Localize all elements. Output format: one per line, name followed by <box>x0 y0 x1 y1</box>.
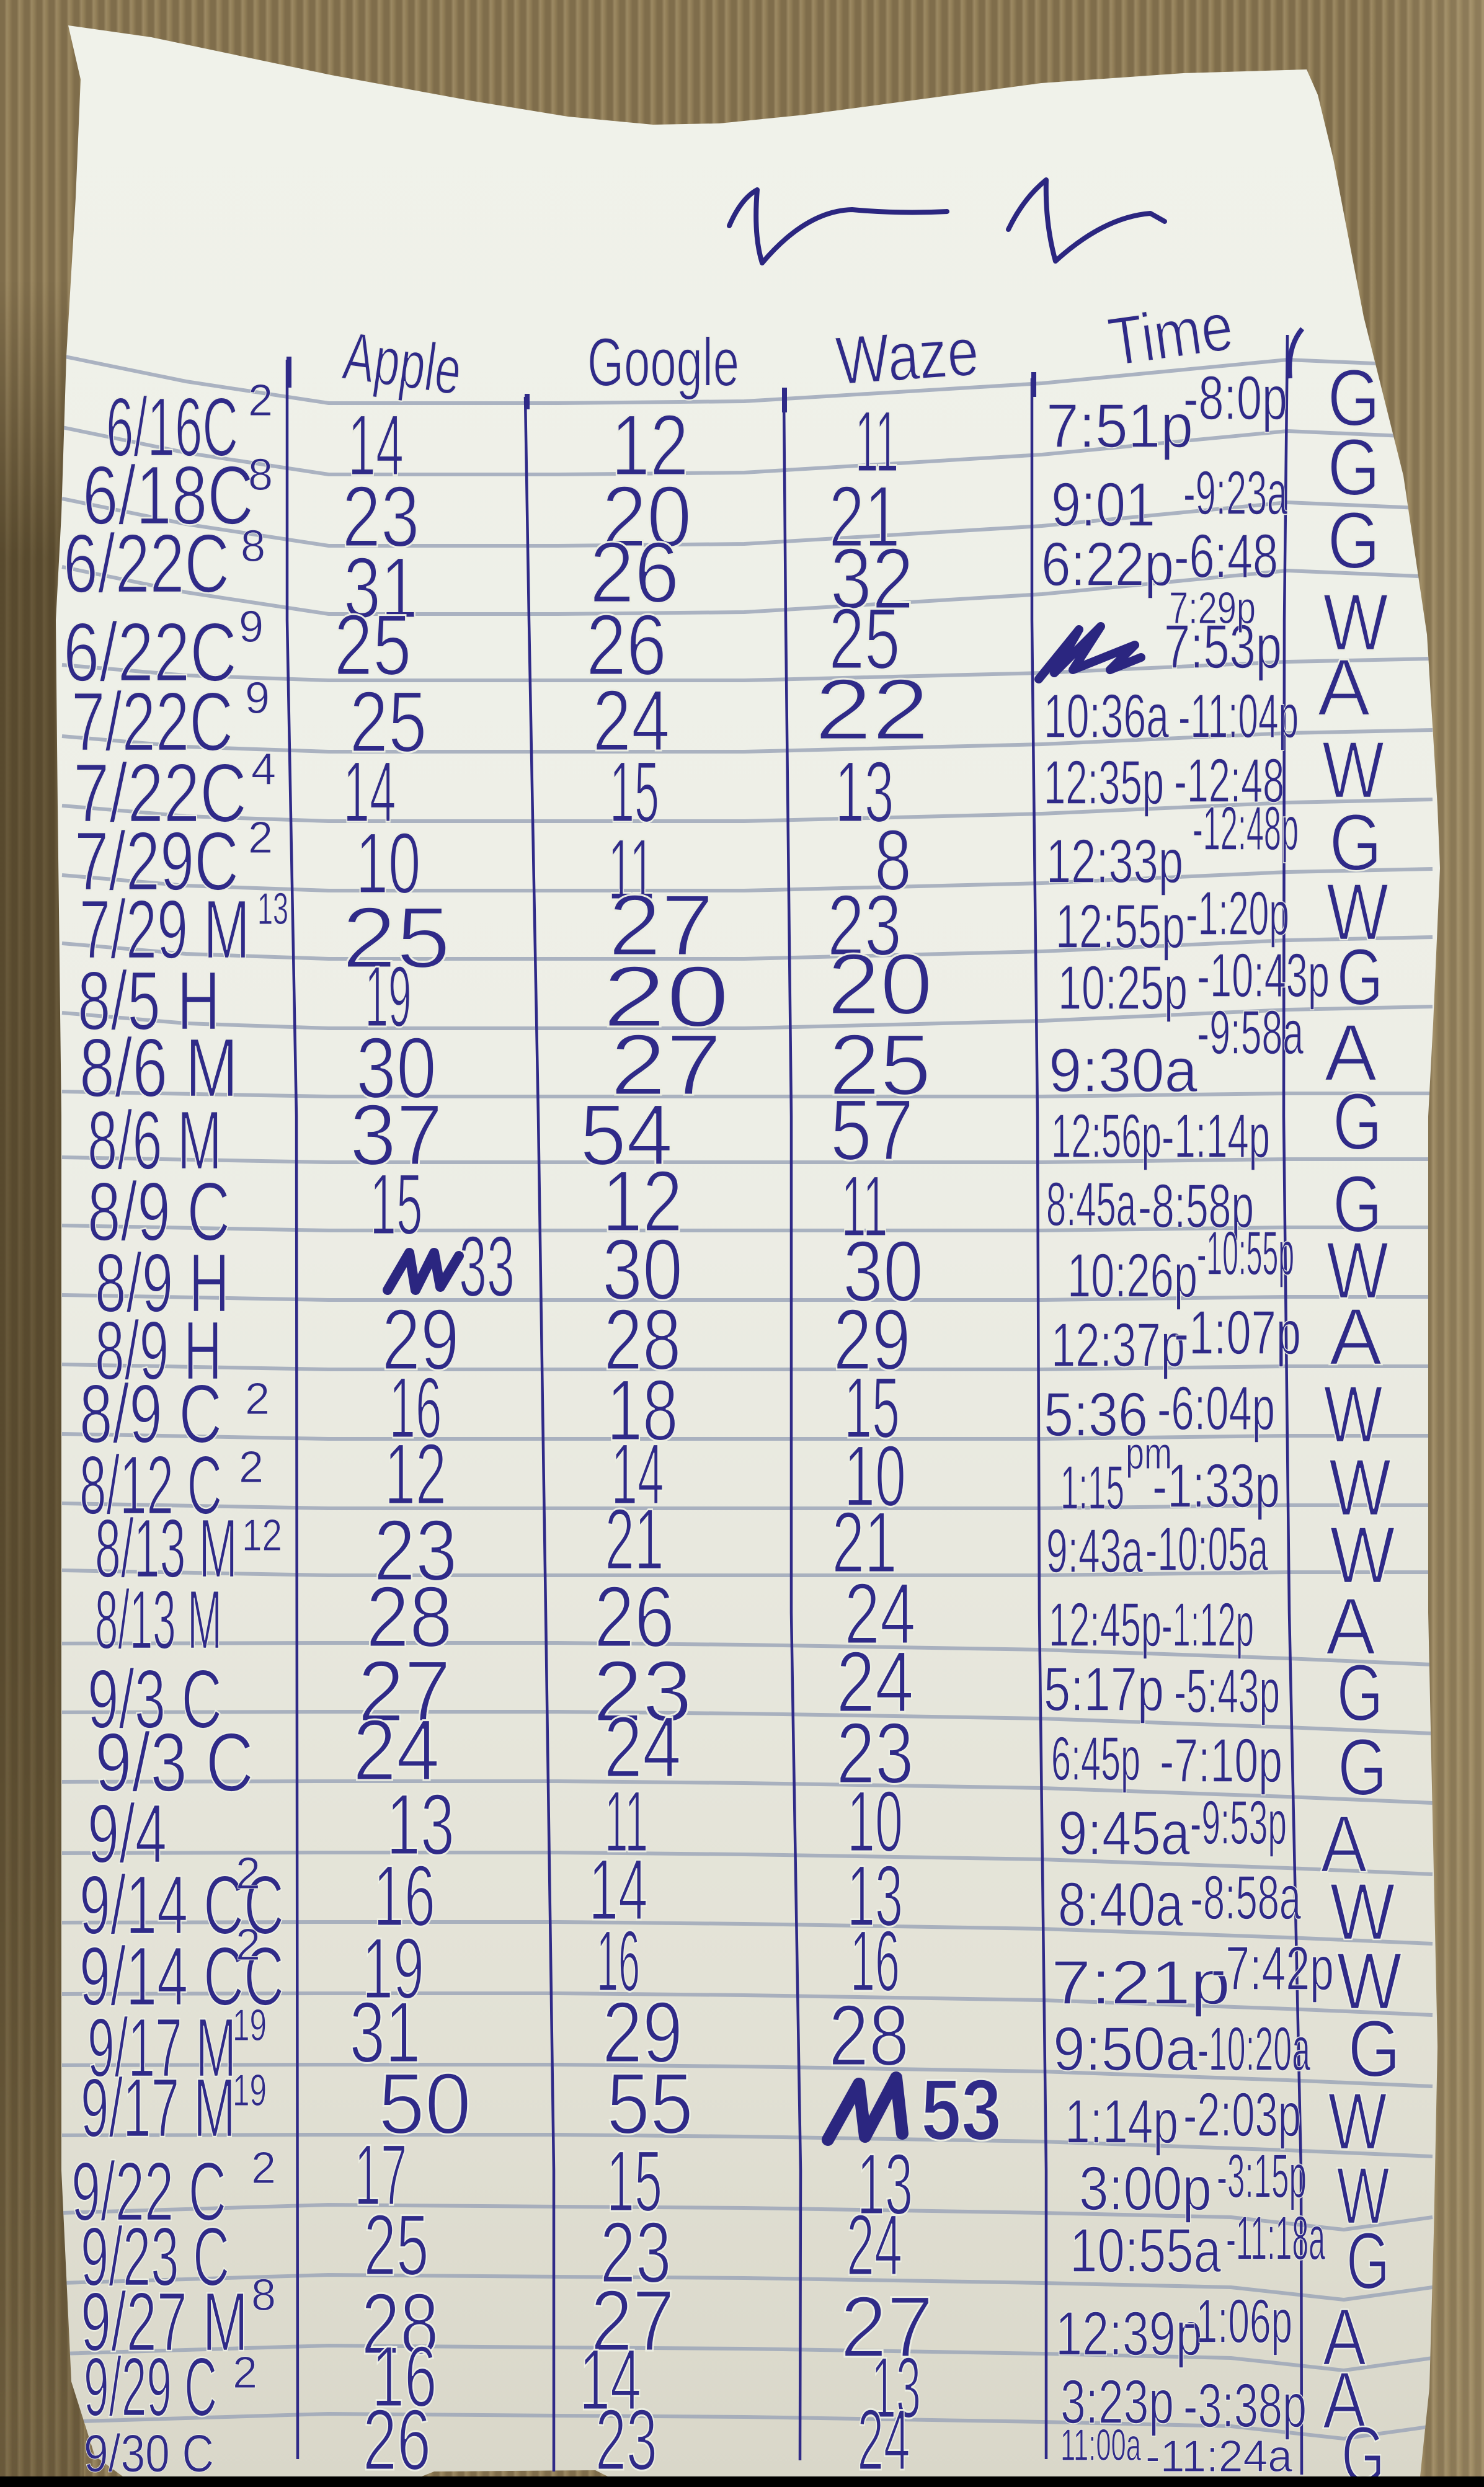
row 9/14 C second: 16 <box>597 1912 640 2009</box>
row 9/3 C second: 23 <box>836 1704 914 1802</box>
row 8/13 M: 9:43a <box>1046 1516 1143 1586</box>
row 8/13 M <box>95 1490 1395 1600</box>
row 6/18 C: -9:23a <box>1183 458 1287 528</box>
row 8/6 M: 27 <box>610 1016 722 1113</box>
row 9/17 M second: W <box>1328 2076 1387 2166</box>
row 9/3 C: 5:17p <box>1044 1655 1164 1724</box>
row 7/29 C: -12:48p <box>1193 794 1299 863</box>
row 8/5 H <box>78 932 1383 1048</box>
row 7/22 C second: 15 <box>610 743 659 840</box>
row 9/27 M: 27 <box>590 2272 675 2369</box>
row 7/29 C: 12:33p <box>1046 827 1183 896</box>
row 8/9 C: 15 <box>370 1155 423 1253</box>
row 9/29 C <box>84 2328 1366 2445</box>
row 8/6 M second: G <box>1333 1076 1382 1167</box>
row 8/9 C: 11 <box>841 1157 888 1255</box>
row 9/17 M second: 9/17 M <box>81 2061 236 2155</box>
scribble: top squiggles <box>729 180 1165 263</box>
row 7/29 M: 25 <box>342 889 450 986</box>
row 9/23 C: 9/23 C <box>81 2210 229 2303</box>
row 8/9 H second: 28 <box>604 1291 681 1388</box>
row 6/16 C: 14 <box>348 396 404 494</box>
row 9/22 C: 3:00p <box>1079 2154 1212 2223</box>
column divider lines <box>287 329 1302 2475</box>
row 8/9 C second: 5:36 <box>1044 1380 1148 1449</box>
row 9/4 <box>87 1773 1367 1889</box>
row 7/29 C: 10 <box>356 814 420 912</box>
row 9/23 C <box>81 2196 1390 2306</box>
row 6/22 C: 31 <box>344 539 418 636</box>
row 8/9 H <box>95 1217 1388 1330</box>
row 6/16 C: 7:51p <box>1046 391 1193 461</box>
row 6/22 C second: 6/22C <box>63 605 237 699</box>
row 6/16 C: 12 <box>611 396 688 494</box>
row 8/13 M: -10:05a <box>1145 1515 1268 1584</box>
row 8/12 C: -1:33p <box>1152 1451 1280 1521</box>
row 9/17 M second: 53 <box>921 2061 1002 2158</box>
row 8/6 M second: -1:14p <box>1162 1101 1270 1171</box>
column headings: Time <box>1104 288 1237 381</box>
column headings: Google <box>587 324 739 401</box>
row 9/14 C first: 2 <box>236 1849 260 1898</box>
row 8/9 H: -10:55p <box>1197 1219 1294 1288</box>
row 8/13 M: W <box>1330 1510 1395 1600</box>
row 9/22 C: 17 <box>355 2126 407 2223</box>
row 8/9 C second: 18 <box>606 1361 678 1459</box>
row 9/22 C: 13 <box>857 2135 913 2233</box>
row 9/23 C: 23 <box>600 2204 671 2301</box>
row 9/27 M: 9/27 M <box>81 2275 248 2369</box>
row 9/22 C: 2 <box>251 2143 276 2193</box>
row 8/6 M: A <box>1325 1007 1377 1098</box>
row 9/3 C: G <box>1337 1647 1383 1738</box>
row 9/3 C second: G <box>1338 1722 1387 1812</box>
row 8/13 M second: 26 <box>594 1568 675 1665</box>
row 7/22 C: A <box>1317 642 1371 732</box>
row 7/22 C: 22 <box>815 661 929 758</box>
row 8/5 H: 10:25p <box>1058 953 1188 1023</box>
row 8/12 C: 12 <box>384 1425 447 1523</box>
row 8/9 C second: 16 <box>389 1359 442 1456</box>
row 9/3 C: 24 <box>836 1633 914 1730</box>
row 8/13 M second <box>95 1565 1375 1671</box>
row 9/29 C: 16 <box>372 2328 437 2425</box>
row 8/6 M: 8/6 M <box>79 1021 238 1114</box>
row 8/13 M second: 8/13 M <box>95 1573 222 1666</box>
row 9/4: A <box>1321 1799 1367 1889</box>
column headings: Waze <box>833 313 981 399</box>
row 7/22 C second: W <box>1322 724 1384 815</box>
row 7/29 C: 11 <box>608 821 655 918</box>
row 9/4: 9/4 <box>87 1787 167 1880</box>
row 8/12 C: W <box>1329 1442 1391 1533</box>
row 8/9 H: 30 <box>602 1221 683 1318</box>
row 6/22 C: -6:48 <box>1174 522 1278 591</box>
row 9/23 C: -11:18a <box>1226 2204 1325 2273</box>
row 7/22 C: -11:04p <box>1178 682 1299 751</box>
row 7/22 C: 7/22C <box>71 675 233 768</box>
row 8/13 M: 23 <box>373 1502 458 1599</box>
row 9/17 M first <box>87 1983 1400 2094</box>
row 9/14 C first: -8:58a <box>1190 1863 1301 1933</box>
row 7/29 M <box>79 866 1388 986</box>
row 6/18 C: 21 <box>829 468 900 565</box>
row 9/27 M: 27 <box>840 2278 933 2375</box>
row 9/27 M: A <box>1323 2292 1366 2382</box>
row 8/9 C: 8:45a <box>1046 1170 1136 1239</box>
row 9/3 C second: 24 <box>604 1698 681 1795</box>
row 9/27 M <box>81 2271 1366 2382</box>
row 8/13 M second: A <box>1326 1581 1375 1671</box>
row 9/17 M second: 1:14p <box>1065 2087 1178 2156</box>
row 6/16 C: -8:0p <box>1183 363 1287 433</box>
row 7/29 M: 23 <box>827 876 902 974</box>
row 7/22 C: 24 <box>593 672 670 769</box>
row 9/29 C: A <box>1323 2355 1366 2445</box>
row 9/17 M second: 55 <box>606 2055 693 2152</box>
row 9/14 C second: W <box>1337 1936 1402 2026</box>
row 9/27 M: 12:39p <box>1055 2299 1202 2369</box>
row 9/14 C first: 8:40a <box>1058 1870 1183 1939</box>
row 9/3 C: 9/3 C <box>87 1652 222 1746</box>
row 9/17 M first: 29 <box>602 1983 683 2081</box>
row 8/12 C: 8/12 C <box>79 1438 222 1532</box>
row 6/16 C: 11 <box>855 393 899 490</box>
row 8/12 C <box>79 1425 1391 1533</box>
row 8/13 M: 21 <box>605 1490 664 1588</box>
row 9/4: 13 <box>386 1776 455 1873</box>
row 8/9 H second: 29 <box>833 1291 910 1388</box>
row 6/22 C: 26 <box>589 523 680 621</box>
row 8/13 M: 12 <box>242 1511 282 1560</box>
row 9/3 C: 23 <box>593 1642 692 1740</box>
row 9/17 M first: G <box>1348 2003 1400 2094</box>
row 7/29 C: 7/29C <box>74 814 239 908</box>
row 7/22 C second: -12:48 <box>1174 746 1284 816</box>
row 9/30 C: -11:24a <box>1145 2432 1293 2481</box>
row 8/13 M second: 12:45p <box>1049 1590 1162 1660</box>
row 8/13 M: 21 <box>832 1493 897 1591</box>
row 9/14 C second: 9/14 CC <box>79 1929 284 2023</box>
row 7/22 C <box>71 642 1371 770</box>
row 6/18 C: 9:01 <box>1051 470 1155 540</box>
row 9/22 C <box>71 2126 1390 2241</box>
row 9/14 C second: -7:42p <box>1211 1934 1334 2003</box>
row 8/9 C <box>87 1152 1382 1258</box>
row 9/14 C second: 19 <box>362 1920 424 2017</box>
row 9/17 M second: -2:03p <box>1183 2080 1301 2150</box>
row 6/16 C: G <box>1327 352 1380 443</box>
row 9/29 C: 3:23p <box>1060 2367 1174 2437</box>
row 6/18 C: 20 <box>602 468 692 565</box>
row 6/22 C: 8 <box>241 522 265 571</box>
row 6/22 C second: 7:53p <box>1164 612 1282 682</box>
row 9/14 C first: 13 <box>847 1847 903 1944</box>
row 7/29 M: 7/29 M <box>79 883 250 976</box>
row 8/6 M: 30 <box>356 1019 437 1116</box>
row 8/9 C second: 2 <box>245 1374 270 1424</box>
row 8/6 M: 9:30a <box>1049 1036 1197 1105</box>
row 9/17 M second: 19 <box>233 2066 267 2116</box>
row 7/22 C second: 12:35p <box>1044 748 1164 817</box>
row 9/3 C: -5:43p <box>1174 1657 1280 1726</box>
row 8/6 M <box>79 998 1377 1116</box>
row 9/14 C second <box>79 1912 1402 2026</box>
column headings: Apple <box>339 318 466 409</box>
row 9/23 C: 25 <box>363 2196 429 2293</box>
row 9/17 M first: 19 <box>233 2001 267 2050</box>
row 9/17 M first: -10:20a <box>1197 2014 1310 2084</box>
row 9/30 C: 24 <box>857 2391 910 2487</box>
row 8/9 H: 8/9 H <box>95 1236 229 1330</box>
row 9/29 C: 9/29 C <box>84 2340 217 2434</box>
row 8/12 C: 14 <box>611 1425 664 1523</box>
row 7/29 M: 27 <box>608 876 714 974</box>
row 8/5 H: G <box>1337 932 1383 1022</box>
row 8/9 C second: -6:04p <box>1157 1374 1275 1443</box>
row 7/22 C second: 14 <box>344 743 396 840</box>
row 8/9 H: 10:26p <box>1067 1241 1197 1310</box>
row 6/22 C second: 26 <box>586 596 667 693</box>
row 8/9 H second: -1:07p <box>1174 1298 1301 1368</box>
row 9/17 M second: 50 <box>378 2055 471 2152</box>
row 7/22 C: 10:36a <box>1044 682 1169 751</box>
row 7/29 M: 12:55p <box>1055 892 1185 961</box>
row 9/29 C: -3:38p <box>1183 2371 1307 2440</box>
row 7/29 C <box>74 794 1382 918</box>
row 9/3 C second: 9/3 C <box>95 1715 254 1809</box>
row 7/22 C: 9 <box>245 674 270 723</box>
row 9/27 M: -1:06p <box>1183 2287 1292 2356</box>
row 9/17 M first: 28 <box>829 1986 909 2084</box>
row 7/29 C: G <box>1330 797 1382 888</box>
row 8/6 M second: 57 <box>830 1081 914 1178</box>
row 7/29 M: -1:20p <box>1186 879 1289 948</box>
row 8/9 C: 12 <box>602 1152 683 1250</box>
row 9/27 M: 28 <box>361 2275 439 2372</box>
row 6/22 C second: 25 <box>334 596 412 693</box>
row 6/18 C: 6/18C <box>82 448 254 542</box>
row 9/17 M first: 31 <box>350 1983 420 2081</box>
row 7/29 M: W <box>1326 866 1388 957</box>
row 8/13 M second: -1:12p <box>1162 1590 1254 1660</box>
row 6/22 C second <box>63 577 1388 699</box>
row 6/22 C second: 7:29p <box>1169 584 1256 633</box>
row 9/30 C: 11:00a <box>1060 2421 1142 2470</box>
row 9/14 C second: 2 <box>236 1920 260 1970</box>
row 9/23 C: 10:55a <box>1070 2216 1221 2285</box>
row 8/5 H: 20 <box>603 948 729 1045</box>
row 8/13 M: 8/13 M <box>95 1502 238 1595</box>
row 8/6 M second: 37 <box>350 1086 443 1183</box>
row 9/14 C second: 16 <box>850 1912 900 2009</box>
row 6/22 C second: 9 <box>239 602 264 652</box>
row 6/22 C: 32 <box>830 530 914 627</box>
row 9/22 C: 9/22 C <box>71 2145 226 2238</box>
row 9/3 C: 27 <box>358 1642 451 1740</box>
row 9/14 C second: 7:21p <box>1051 1948 1230 2018</box>
row 9/29 C: 13 <box>871 2339 921 2436</box>
row 9/3 C second: -7:10p <box>1160 1726 1282 1795</box>
row 6/16 C <box>106 352 1380 494</box>
row 6/18 C: 23 <box>342 468 419 565</box>
row 6/22 C <box>63 495 1380 636</box>
row 7/22 C second: 13 <box>835 743 894 840</box>
row 6/22 C: 6:22p <box>1041 530 1174 599</box>
row 8/9 H second: 12:37p <box>1051 1310 1185 1380</box>
row 8/9 H second: 29 <box>382 1291 459 1388</box>
row 8/9 H second: 8/9 H <box>95 1304 222 1397</box>
row 6/22 C second: 25 <box>829 590 900 687</box>
row 6/16 C: 6/16C <box>106 380 238 474</box>
row 9/29 C: 14 <box>579 2331 641 2428</box>
row 7/29 M: 13 <box>257 884 288 934</box>
row 9/4: -9:53p <box>1190 1788 1287 1857</box>
row 8/9 H: W <box>1326 1225 1388 1315</box>
row 9/27 M: 8 <box>251 2271 276 2320</box>
row 9/29 C: 2 <box>233 2348 257 2398</box>
row 9/30 C: 9/30 C <box>84 2424 214 2483</box>
row 7/29 C: 2 <box>248 813 273 863</box>
row 9/14 C first: 14 <box>589 1841 647 1938</box>
row 8/13 M second: 28 <box>366 1568 453 1665</box>
row 9/30 C <box>84 2391 1385 2487</box>
row 8/12 C: 1:15 <box>1060 1453 1124 1523</box>
row 6/16 C: 2 <box>248 376 273 425</box>
row 9/30 C: 26 <box>363 2391 431 2487</box>
row 7/22 C second <box>73 724 1384 840</box>
row 6/22 C: 6/22C <box>63 517 229 610</box>
row 9/22 C: W <box>1337 2150 1390 2241</box>
row 7/22 C second: 4 <box>251 745 276 794</box>
row 8/9 H second: A <box>1330 1291 1382 1382</box>
row 8/9 C: -8:58p <box>1138 1172 1254 1241</box>
row 8/6 M: 25 <box>829 1016 931 1113</box>
black bar along bottom edge <box>0 2476 1484 2487</box>
row 9/30 C: 23 <box>595 2391 657 2487</box>
row 9/14 C first: W <box>1330 1866 1395 1957</box>
row 9/4: 9:45a <box>1058 1799 1190 1868</box>
row 8/9 C second: 15 <box>844 1359 900 1456</box>
row 8/9 C second: W <box>1323 1369 1383 1459</box>
row 9/3 C second: 24 <box>353 1701 440 1799</box>
row 9/14 C first <box>79 1841 1395 1957</box>
row 9/3 C second: 6:45p <box>1051 1724 1140 1794</box>
row 7/22 C second: 7/22C <box>73 746 247 840</box>
row 8/6 M second: 8/6 M <box>87 1093 222 1187</box>
row 9/22 C: 15 <box>606 2132 662 2230</box>
row 8/9 H: 33 <box>459 1217 515 1315</box>
row 6/18 C: 8 <box>248 450 273 500</box>
row 8/6 M: -9:58a <box>1197 998 1304 1067</box>
row 8/5 H: 8/5 H <box>78 954 220 1048</box>
row 9/17 M second <box>81 2055 1387 2166</box>
row 9/4: 11 <box>605 1773 648 1870</box>
row 9/3 C <box>87 1633 1383 1746</box>
row 9/3 C second <box>95 1698 1387 1812</box>
column headings <box>339 288 1237 409</box>
row 9/23 C: G <box>1346 2215 1390 2306</box>
row 8/12 C: 2 <box>239 1443 264 1492</box>
row 6/18 C: G <box>1327 422 1380 512</box>
row 8/9 H second <box>95 1291 1382 1397</box>
row 9/4: 10 <box>847 1773 903 1870</box>
row 8/6 M second: 54 <box>580 1086 673 1183</box>
row 9/17 M first: 9:50a <box>1053 2014 1197 2084</box>
row 8/12 C: pm <box>1126 1429 1172 1479</box>
row 8/5 H: 19 <box>365 948 412 1045</box>
row 8/6 M second: 12:56p <box>1051 1101 1162 1171</box>
row 6/22 C: G <box>1327 495 1380 585</box>
row 8/5 H: -10:43p <box>1197 941 1330 1010</box>
row 9/14 C first: 16 <box>373 1847 435 1944</box>
row 8/9 C second: 8/9 C <box>79 1367 222 1461</box>
row 7/29 C: 8 <box>874 811 912 909</box>
row 8/6 M second <box>87 1076 1382 1187</box>
row 6/22 C second: W <box>1323 577 1388 667</box>
row 8/12 C: 10 <box>844 1427 906 1524</box>
row 9/22 C: -3:15p <box>1217 2142 1307 2211</box>
row 8/13 M second: 24 <box>845 1565 915 1662</box>
row 9/17 M first: 9/17 M <box>87 2001 236 2094</box>
row 9/23 C: 24 <box>846 2196 902 2293</box>
row 8/9 C second <box>79 1359 1383 1461</box>
row 8/5 H: 20 <box>827 935 933 1033</box>
row 8/9 C: 8/9 C <box>87 1165 230 1258</box>
row 9/14 C first: 9/14 CC <box>79 1858 284 1952</box>
row 6/18 C <box>82 422 1380 565</box>
row 8/9 C: G <box>1333 1159 1382 1249</box>
row 8/9 H: 30 <box>843 1222 923 1320</box>
row 7/22 C: 25 <box>350 673 427 770</box>
